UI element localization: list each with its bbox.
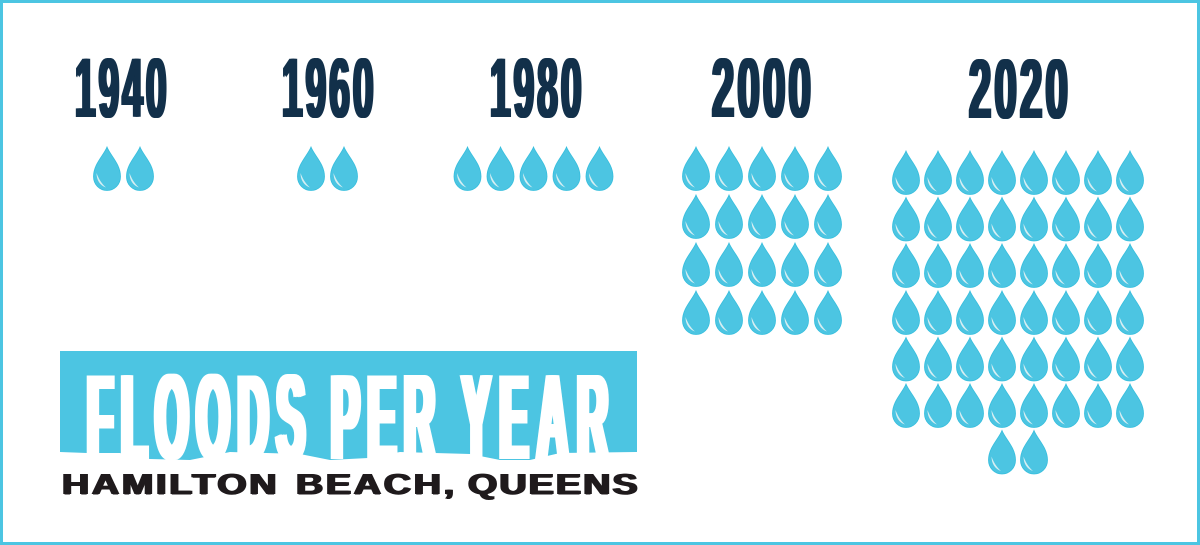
year label: 2020: 2020 — [968, 42, 1071, 136]
title: Floods Per Year: FLOODS — [87, 349, 313, 485]
column: 2020 — [892, 42, 1144, 474]
year label: 1940: 1940 — [74, 41, 169, 135]
subtitle: Hamilton Beach, Queens: QUEENS — [468, 468, 640, 500]
title block — [60, 349, 640, 500]
year label: 2000: 2000 — [712, 41, 814, 135]
column: 1940 — [74, 41, 169, 191]
subtitle: Hamilton Beach, Queens: HAMILTON — [62, 468, 279, 500]
subtitle: Hamilton Beach, Queens — [62, 468, 640, 500]
year label: 1980: 1980 — [490, 41, 584, 135]
column: 2000 — [682, 41, 842, 335]
drops: 1980 — [454, 146, 614, 191]
drops: 2020 — [892, 150, 1144, 474]
column: 1960 — [282, 41, 376, 191]
subtitle: Hamilton Beach, Queens: BEACH, — [296, 468, 457, 500]
column: 1980 — [454, 41, 614, 191]
title: Floods Per Year: PER — [331, 349, 443, 485]
title banner — [60, 351, 637, 460]
year label: 1960: 1960 — [282, 41, 376, 135]
drops: 1940 — [93, 146, 154, 191]
drops: 1960 — [297, 146, 358, 191]
title: Floods Per Year: YEAR — [462, 349, 617, 485]
title: Floods Per Year — [86, 349, 617, 485]
drops: 2000 — [682, 146, 842, 335]
